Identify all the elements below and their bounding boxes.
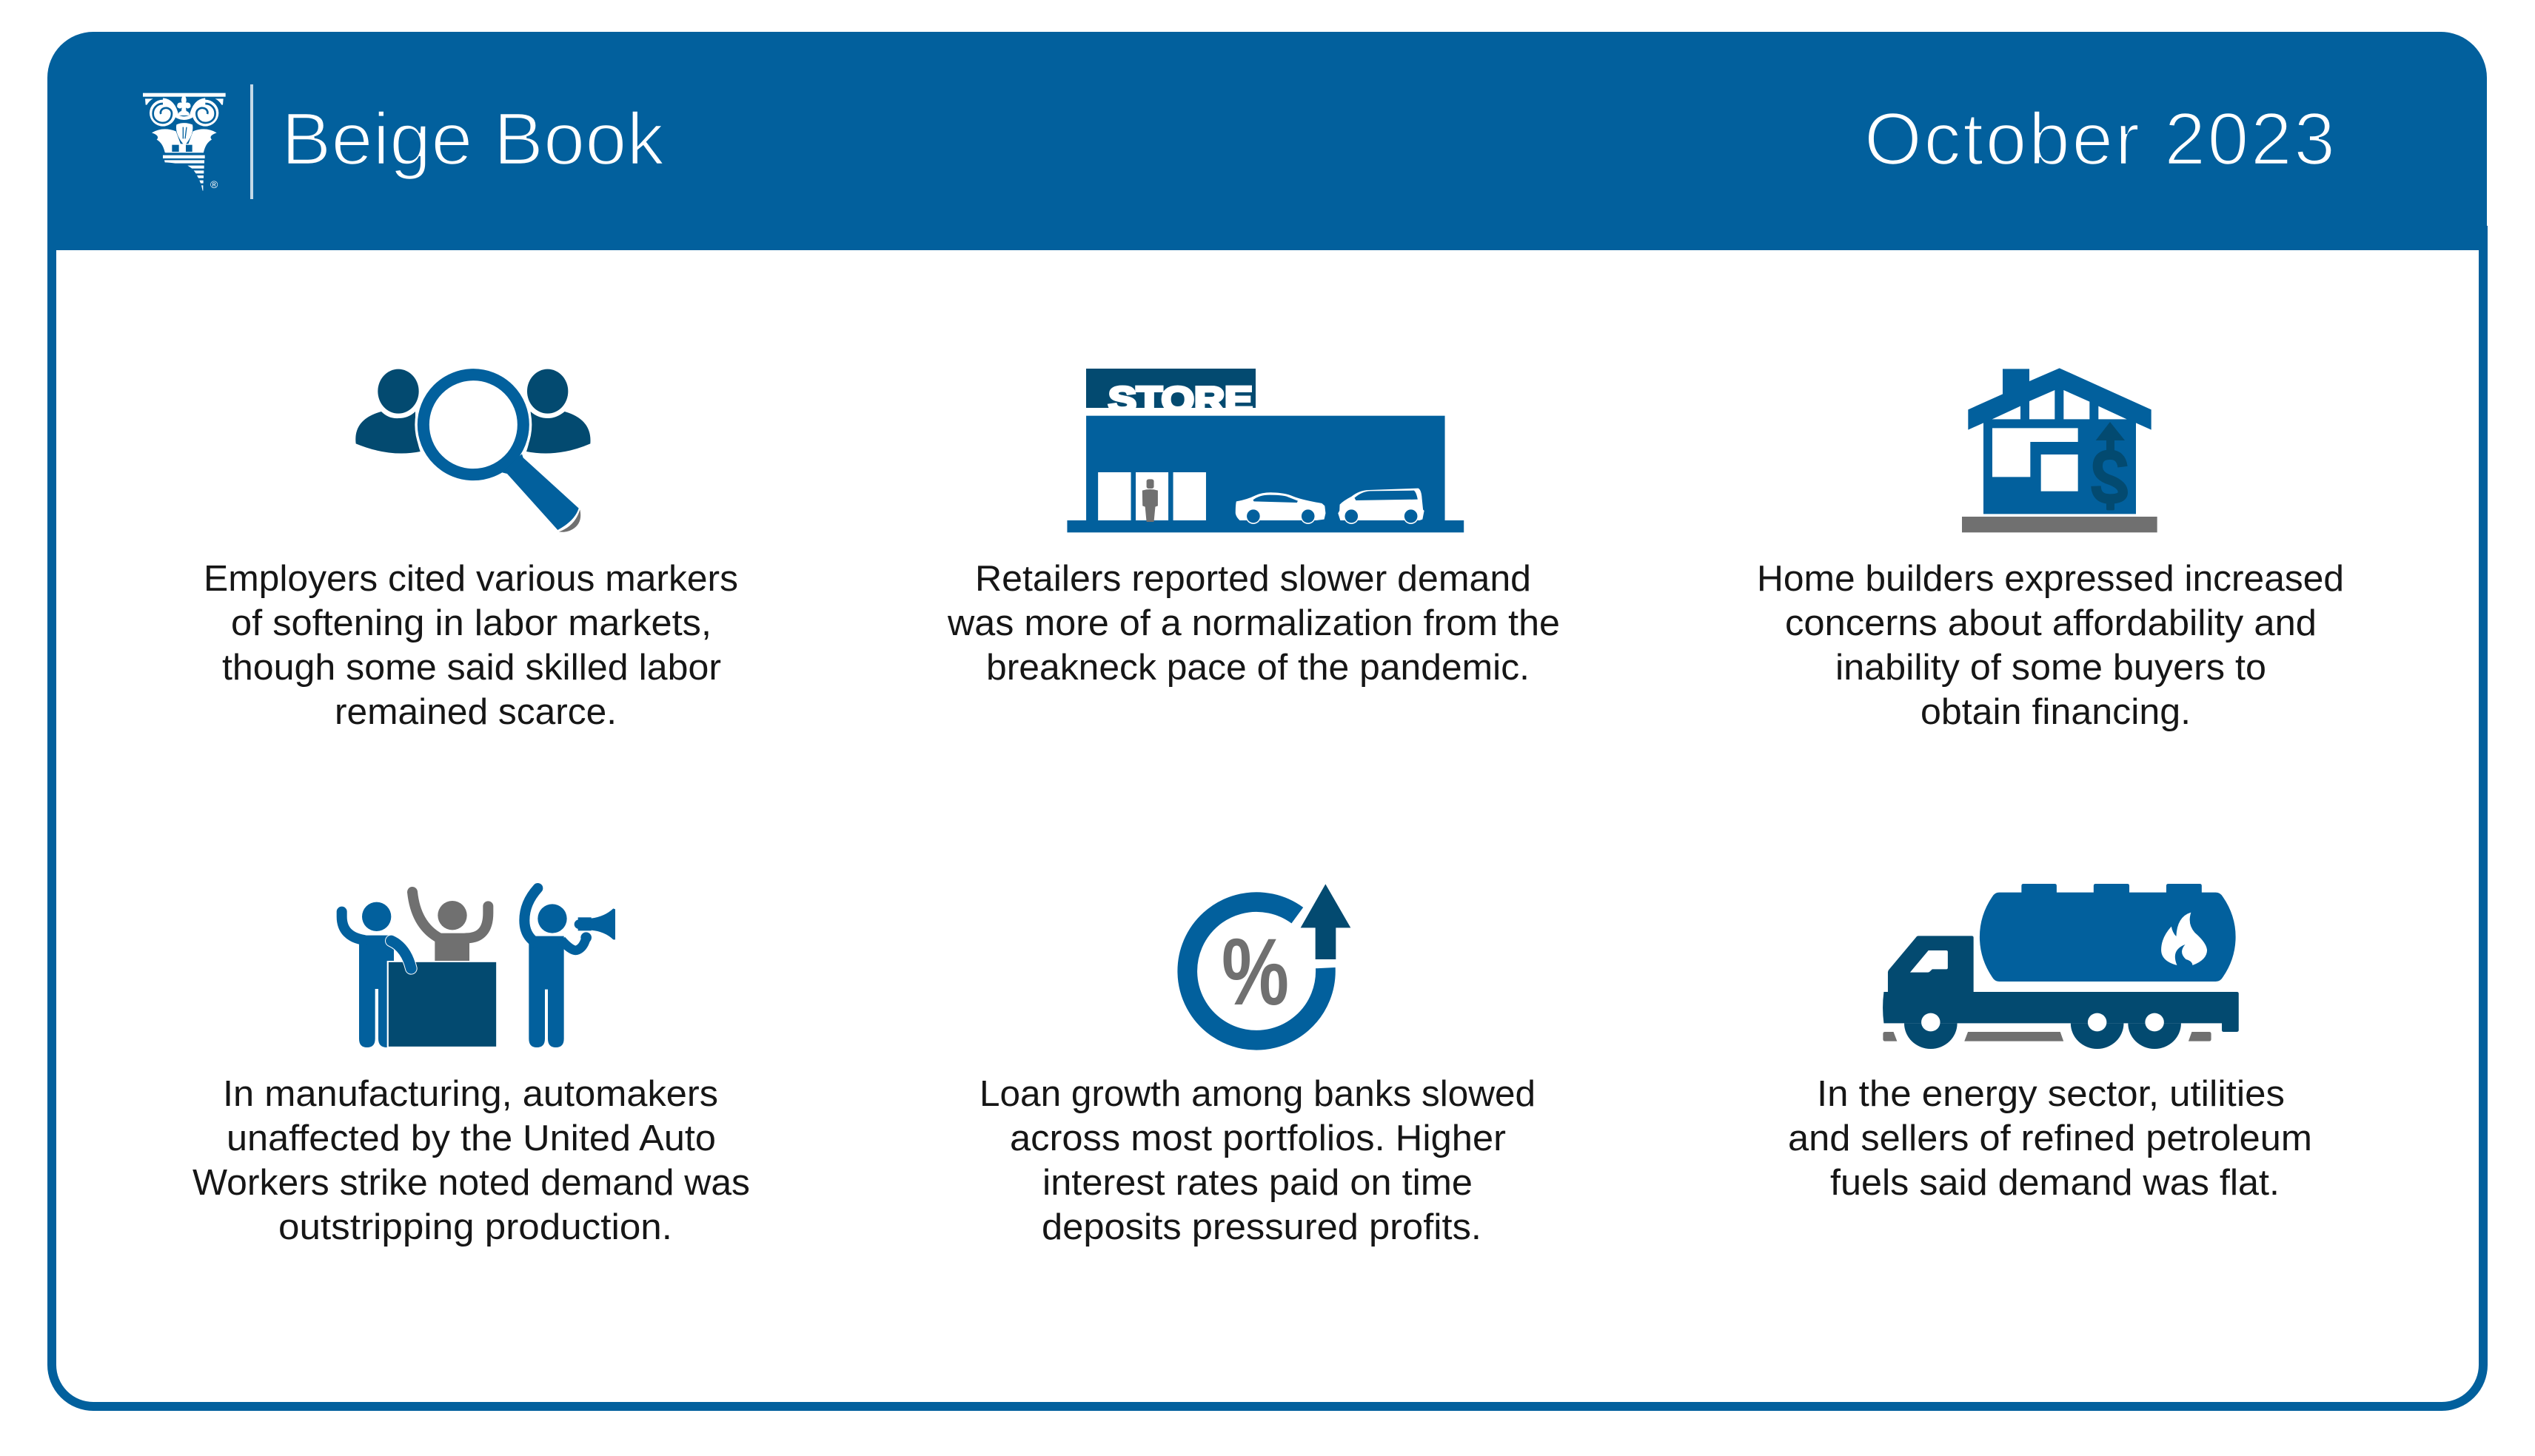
text: energy: and sellers of refined petroleum	[1788, 1118, 2312, 1158]
text: energy: fuels said demand was flat.	[1830, 1163, 2280, 1203]
panel: energy	[1788, 884, 2312, 1203]
store sign: STORE	[1108, 380, 1253, 420]
text: housing: concerns about affordability and	[1785, 603, 2317, 643]
text: housing: obtain financing.	[1920, 692, 2191, 732]
text: banking: across most portfolios. Higher	[1010, 1118, 1506, 1158]
text: housing	[1757, 559, 2344, 732]
icon: strikers	[342, 888, 615, 1047]
panel: manufacturing	[192, 888, 750, 1247]
text: retail: Retailers reported slower demand	[975, 559, 1531, 599]
registered mark: ®	[210, 178, 218, 190]
text: labor markets: though some said skilled labor	[222, 648, 721, 688]
percent sign: %	[1222, 919, 1289, 1025]
text: labor markets: Employers cited various markers	[204, 559, 738, 599]
text: manufacturing: Workers strike noted demand was	[192, 1163, 750, 1203]
text: labor markets	[204, 559, 738, 732]
panel: housing	[1757, 368, 2344, 732]
text: manufacturing: outstripping production.	[278, 1207, 672, 1247]
text: retail: breakneck pace of the pandemic.	[986, 648, 1530, 688]
card frame	[52, 226, 2483, 1406]
text: manufacturing: In manufacturing, automakers	[223, 1074, 718, 1114]
text: retail: was more of a normalization from the	[947, 603, 1560, 643]
text: labor markets: of softening in labor markets,	[231, 603, 711, 643]
icon: interest rate ring	[1188, 884, 1350, 1040]
store building with cars	[1067, 416, 1464, 532]
text: manufacturing: unaffected by the United Auto	[227, 1118, 716, 1158]
logo: column capital	[143, 93, 226, 191]
panel: retail	[947, 369, 1560, 688]
text: banking: deposits pressured profits.	[1042, 1207, 1481, 1247]
icon: tanker truck	[1883, 884, 2239, 1049]
text: labor markets: remained scarce.	[335, 692, 617, 732]
text: banking	[979, 1074, 1536, 1247]
date: October 2023	[1864, 98, 2335, 181]
icon: people with magnifying glass	[355, 369, 591, 532]
title: Beige Book	[281, 98, 665, 181]
ring and arrow	[1188, 884, 1350, 1040]
text: retail	[947, 559, 1560, 688]
text: housing: Home builders expressed increased	[1757, 559, 2344, 599]
text: housing: inability of some buyers to	[1835, 648, 2266, 688]
text: energy	[1788, 1074, 2312, 1203]
logo divider	[250, 84, 253, 199]
text: banking: interest rates paid on time	[1042, 1163, 1473, 1203]
header band	[47, 32, 2487, 250]
text: banking: Loan growth among banks slowed	[979, 1074, 1536, 1114]
icon: house with dollar	[1962, 368, 2157, 532]
text: manufacturing	[192, 1074, 750, 1247]
panel: banking	[979, 884, 1536, 1247]
store sign	[1086, 369, 1256, 408]
panel: labor markets	[204, 369, 738, 732]
icon: store	[1067, 369, 1464, 532]
text: energy: In the energy sector, utilities	[1817, 1074, 2285, 1114]
